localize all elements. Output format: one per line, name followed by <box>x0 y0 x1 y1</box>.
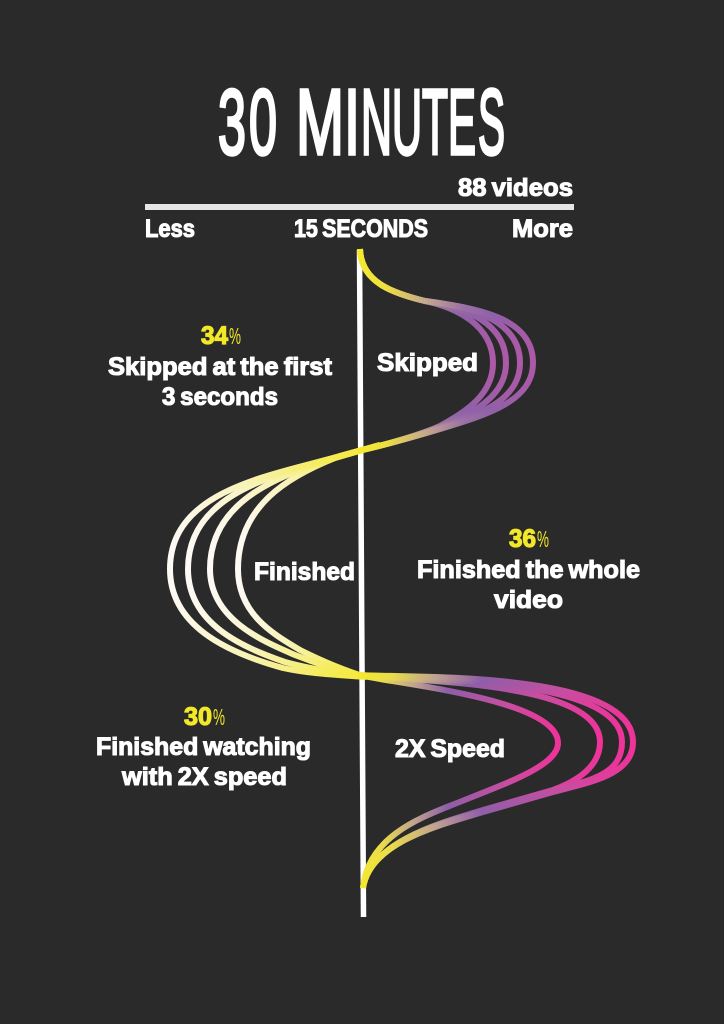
title <box>218 70 505 174</box>
title: U <box>392 70 422 174</box>
center timeline <box>360 250 364 917</box>
callout: 30% 2X speed: % <box>213 704 225 730</box>
title: 0 <box>249 70 277 174</box>
callout: 34% skipped: 34 <box>201 322 228 350</box>
callout: 36% finished: Finished the whole <box>417 556 640 584</box>
callout: 36% finished: % <box>537 526 549 552</box>
label: 2X Speed: 2X Speed <box>395 735 505 763</box>
callout: 36% finished: video <box>494 586 563 614</box>
scale labels: More <box>512 215 573 243</box>
text: S <box>478 70 505 174</box>
title: E <box>448 70 476 174</box>
video count: 88 videos <box>458 174 573 202</box>
curves: finished <box>170 445 380 677</box>
title: I <box>344 70 360 174</box>
callout: 36% finished: 36 <box>509 525 536 553</box>
callout: 34% skipped: % <box>229 323 241 349</box>
callout: 34% skipped <box>108 322 333 411</box>
label: Skipped: Skipped <box>377 349 478 377</box>
callout: 36% finished <box>417 525 640 614</box>
title: 3 <box>218 70 246 174</box>
callout: 34% skipped: Skipped at the first <box>108 353 333 381</box>
scale labels <box>145 215 573 243</box>
curves: 2X speed <box>358 675 633 888</box>
scale labels: 15 SECONDS <box>294 215 428 243</box>
callout: 34% skipped: 3 seconds <box>162 383 278 411</box>
title: T <box>422 70 448 174</box>
callout: 30% 2X speed <box>96 703 311 791</box>
scale labels: Less <box>145 215 195 243</box>
callout: 30% 2X speed: with 2X speed <box>121 763 287 791</box>
curves: skipped <box>358 249 533 451</box>
title: M <box>296 70 344 174</box>
callout: 30% 2X speed: 30 <box>184 703 212 731</box>
scale bar <box>145 204 574 210</box>
label: Finished: Finished <box>254 558 355 586</box>
callout: 30% 2X speed: Finished watching <box>96 733 311 761</box>
title: N <box>361 70 392 174</box>
